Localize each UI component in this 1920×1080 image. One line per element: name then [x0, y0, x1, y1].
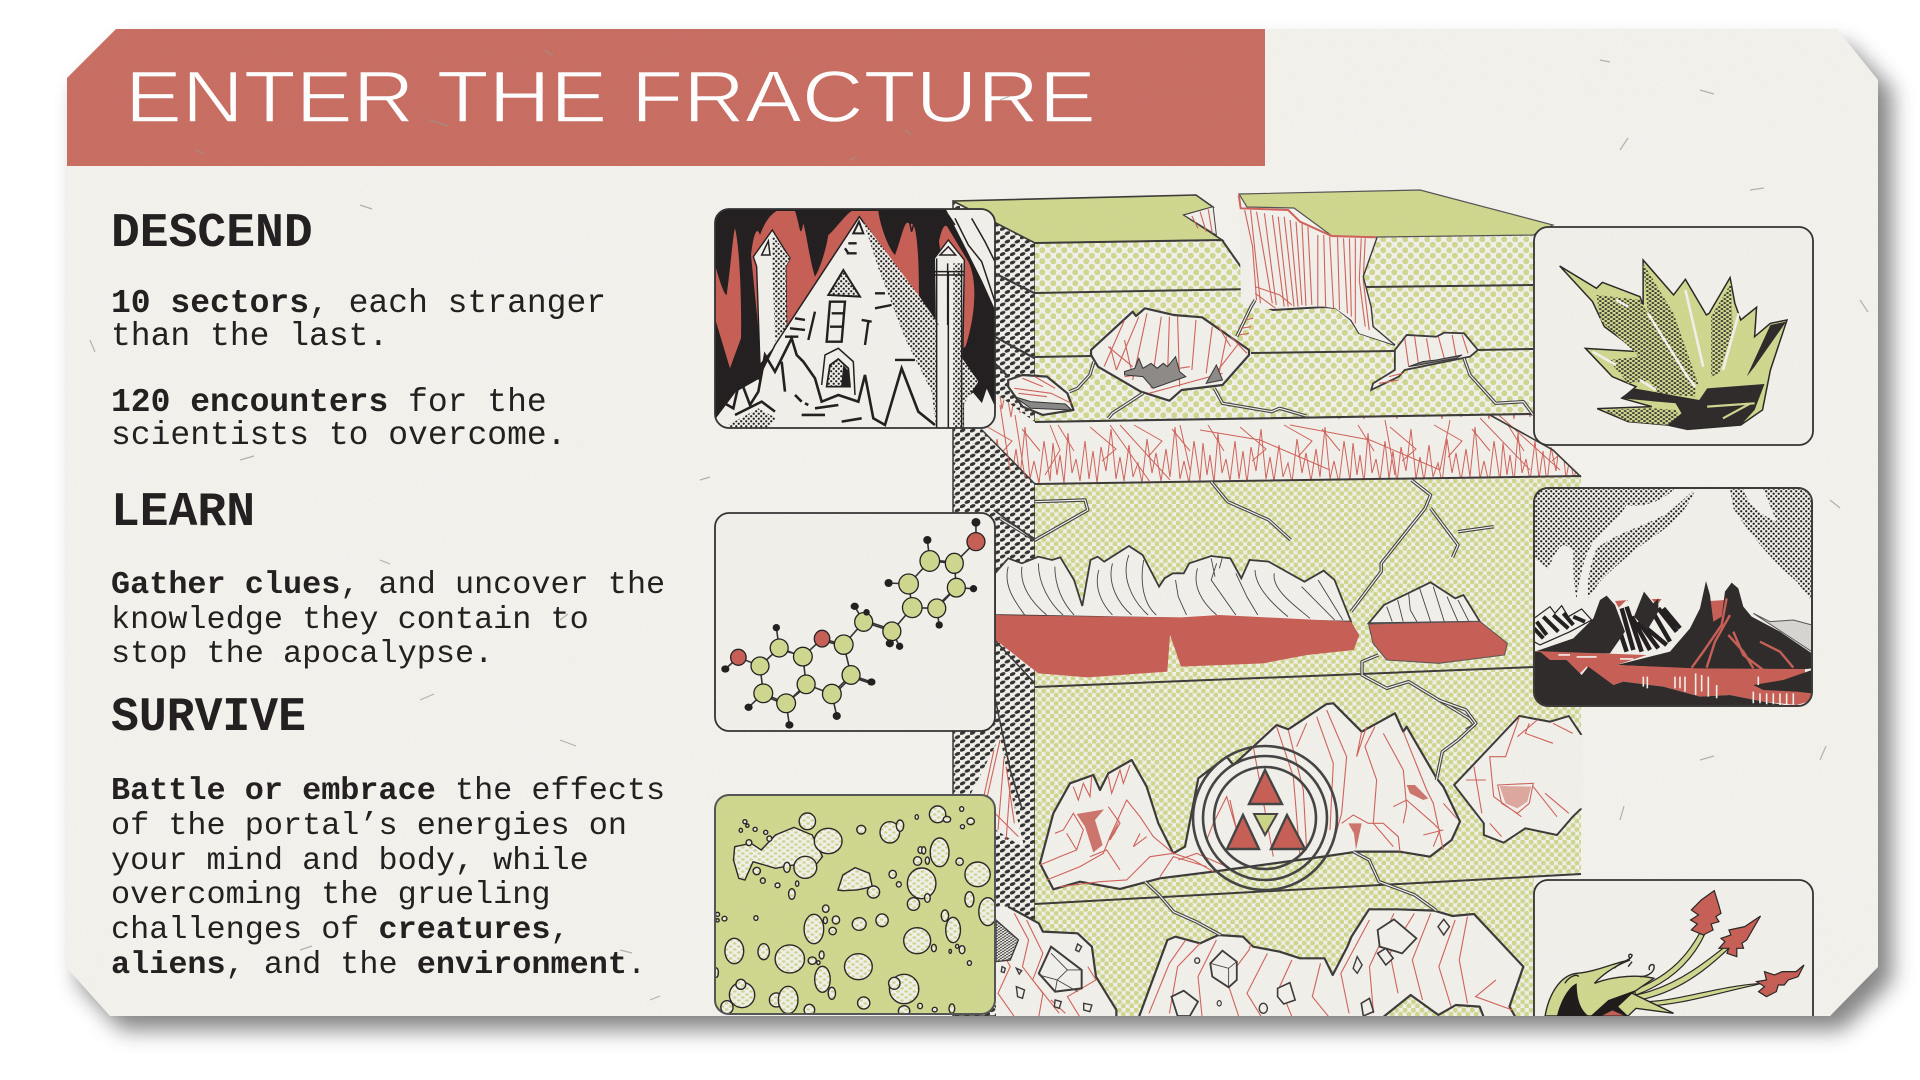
- central rock: [1091, 308, 1249, 401]
- lower mountains: [1040, 703, 1460, 889]
- text: clues: Gather clues, and uncover the: [111, 566, 665, 603]
- heading: descend: DESCEND: [111, 207, 313, 261]
- section: learn: [111, 486, 665, 672]
- right rock and crack: [1371, 333, 1533, 415]
- rock city: [1125, 357, 1222, 388]
- lava streams: [1692, 598, 1793, 670]
- red cavern glow: [715, 211, 988, 378]
- rock right: [1139, 909, 1523, 1017]
- text: sectors: than the last.: [111, 318, 388, 355]
- right tower: [934, 240, 964, 432]
- lava glow: [1615, 599, 1725, 627]
- text: effects: your mind and body, while: [111, 842, 589, 879]
- panel: alien plant: [1534, 880, 1813, 1016]
- text: sectors: 10 sectors, each stranger: [111, 285, 606, 322]
- pyramid: [715, 217, 937, 432]
- upper rocks and cracks: [995, 207, 1306, 418]
- lower mountain red contours: [1040, 710, 1457, 887]
- crystal highlights: [1593, 290, 1739, 390]
- panel: crystal: [1534, 227, 1813, 445]
- distant hatched peaks: [1534, 606, 1592, 645]
- lower mountain outline: [1040, 703, 1460, 889]
- section: survive: [111, 691, 665, 983]
- small rock: [1008, 375, 1074, 415]
- door: [827, 359, 850, 387]
- small spores: [743, 820, 747, 824]
- plant body: [1545, 960, 1674, 1016]
- lava lake: [1534, 651, 1812, 705]
- red atoms: [731, 533, 985, 665]
- strata lines: [1035, 240, 1581, 904]
- panel: green spores: [714, 795, 997, 1016]
- crystal dark base: [1620, 384, 1764, 429]
- crystal: [1039, 947, 1082, 992]
- text: effects: Battle or embrace the effects: [111, 772, 665, 809]
- dark foreground: [1534, 652, 1797, 707]
- green dotted strata: [1035, 235, 1581, 1016]
- panel: cave temple: [715, 209, 997, 432]
- left hatched face: [953, 201, 1035, 1016]
- foreground stalagmites: [715, 338, 935, 425]
- crystal body: [1560, 260, 1787, 429]
- panel: volcano: [1534, 488, 1812, 707]
- heading: learn: LEARN: [111, 486, 255, 540]
- text: effects: overcoming the grueling: [111, 876, 551, 913]
- right mountain fragment: [1454, 716, 1581, 843]
- hatched foothills: [1610, 600, 1690, 655]
- heading: survive: SURVIVE: [111, 691, 306, 745]
- lava slab right: [1369, 621, 1507, 663]
- rock crystals: [1210, 951, 1237, 987]
- green atoms: [751, 551, 965, 713]
- middle mountains with lava: [995, 480, 1507, 730]
- rock left: [996, 907, 1116, 1017]
- lower mountain shading: [1077, 785, 1428, 852]
- hydrogen atoms: [721, 518, 980, 729]
- large blob: [733, 827, 822, 880]
- right lower black: [963, 318, 997, 402]
- crack lines on hatch: [995, 273, 1035, 377]
- title: ENTER THE FRACTURE: [125, 57, 1096, 138]
- upper right rock wall: [945, 209, 997, 315]
- text: clues: stop the apocalypse.: [111, 635, 493, 672]
- molecule bonds: [725, 522, 976, 725]
- bottom rocks with crystals: [996, 882, 1523, 1017]
- lava slab: [995, 615, 1359, 677]
- waterfall cliff: [1239, 195, 1395, 345]
- text: effects: aliens, and the environment.: [111, 946, 646, 983]
- top green slabs: [953, 190, 1553, 243]
- text: encounters: scientists to overcome.: [111, 417, 566, 454]
- red fracture band: [982, 393, 1581, 484]
- crack right lower: [1353, 700, 1476, 911]
- portal triangle emblem: [1193, 746, 1337, 890]
- plant stems: [1634, 913, 1763, 1007]
- slab notch: [1184, 207, 1216, 235]
- section: descend: [111, 207, 606, 454]
- text: encounters: 120 encounters for the: [111, 384, 547, 421]
- plant red leaves: [1691, 891, 1804, 997]
- text: clues: knowledge they contain to: [111, 601, 589, 638]
- left tower: [753, 230, 790, 365]
- ash sky halftone: [1534, 488, 1812, 602]
- panel: molecule: [715, 513, 995, 731]
- pyramid halftone: [863, 222, 978, 432]
- mountain range: [995, 546, 1351, 622]
- window: [828, 270, 860, 297]
- second mountain: [1369, 582, 1480, 623]
- text: effects: challenges of creatures,: [111, 911, 570, 948]
- fracture cross-section diagram: [953, 190, 1581, 1017]
- text: effects: of the portal’s energies on: [111, 807, 627, 844]
- lake ripples: [1558, 655, 1793, 705]
- header banner: [67, 29, 1265, 166]
- left hatch rock: [969, 510, 1035, 848]
- volcano silhouettes: [1537, 596, 1625, 653]
- crystal halftone shading: [1596, 263, 1733, 425]
- cracks: [1069, 300, 1306, 418]
- left stalactite black lower: [715, 318, 760, 388]
- cracks: [1000, 480, 1494, 730]
